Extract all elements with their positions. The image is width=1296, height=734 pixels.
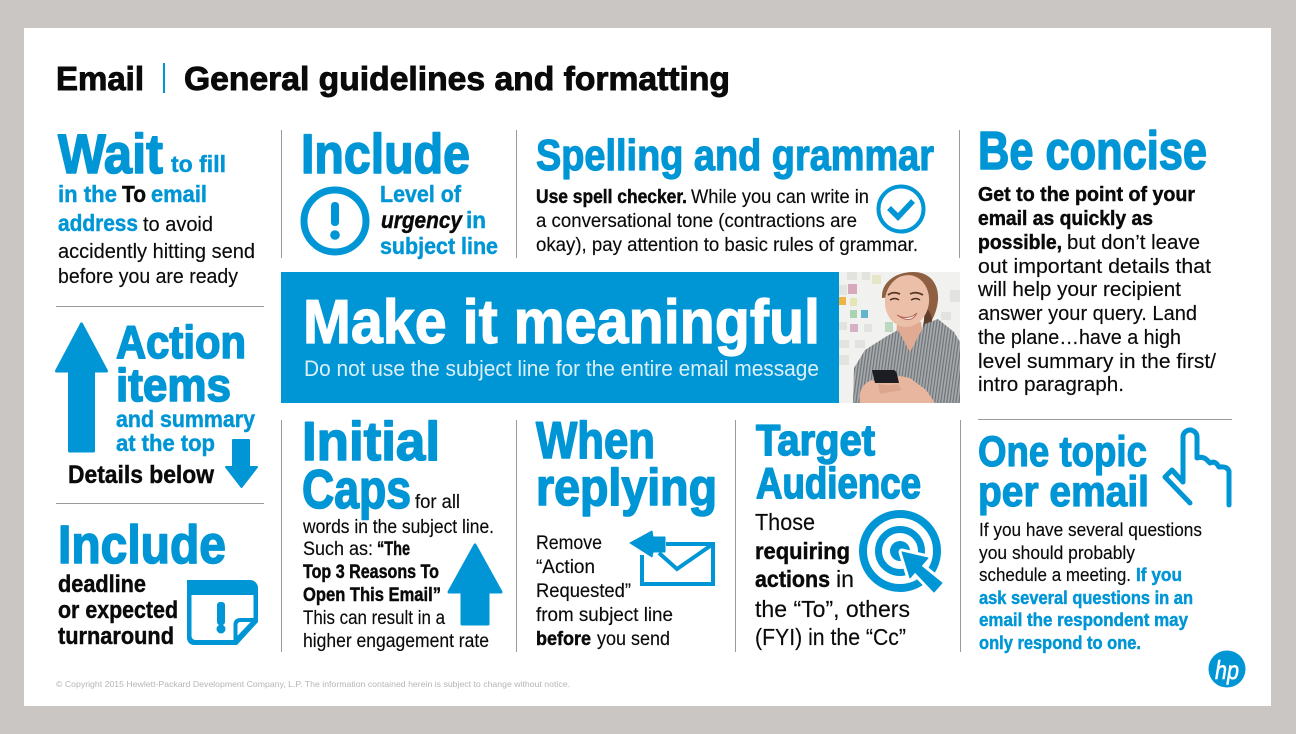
photo: woman using phone xyxy=(839,272,960,403)
panel: be concise xyxy=(977,121,1216,396)
panel: spelling and grammar: While you can write in xyxy=(691,186,869,208)
panel: wait to fill: to avoid xyxy=(143,213,213,236)
panel: wait to fill: To xyxy=(122,181,146,207)
banner: make it meaningful xyxy=(281,272,839,403)
panel: target audience xyxy=(755,416,942,650)
panel: include deadline xyxy=(58,515,258,650)
panel: be concise: possible, xyxy=(978,231,1062,254)
panel: action items: and summary xyxy=(116,406,255,432)
panel: initial caps: “The xyxy=(377,539,410,560)
panel: include urgency: in xyxy=(466,207,486,233)
panel: include deadline: turnaround xyxy=(58,623,174,650)
icon: big up arrow xyxy=(56,324,106,451)
panel: target audience: (FYI) in the “Cc” xyxy=(755,624,906,650)
panel: include urgency: Include xyxy=(301,122,470,185)
panel: target audience: Target xyxy=(756,416,875,465)
panel: when replying: Remove xyxy=(536,532,602,554)
panel: be concise: the plane…have a high xyxy=(978,326,1181,349)
panel: be concise: intro paragraph. xyxy=(978,373,1124,396)
icon: envelope with arrow xyxy=(630,531,713,584)
icon: pointing hand xyxy=(1165,430,1229,505)
panel: spelling and grammar: a conversational tone (contractions are xyxy=(536,210,857,232)
panel: be concise: Be concise xyxy=(978,121,1207,181)
panel: when replying: Requested” xyxy=(536,580,631,602)
title: General guidelines and formatting xyxy=(184,60,730,97)
icon: check mark circle xyxy=(878,186,924,232)
panel: include deadline: Include xyxy=(58,515,226,575)
panel: be concise: but don’t leave xyxy=(1067,231,1200,254)
phone xyxy=(872,370,899,383)
panel: when replying: from subject line xyxy=(536,604,673,626)
panel: target audience: Audience xyxy=(756,459,921,508)
panel: be concise: Get to the point of your xyxy=(978,183,1195,206)
panel: one topic per email: per email xyxy=(978,468,1149,516)
banner: make it meaningful: Do not use the subject line for the entire email message xyxy=(304,356,819,381)
hair xyxy=(882,272,938,320)
icon: calendar alert xyxy=(187,580,258,645)
panel: one topic per email: only respond to one. xyxy=(979,632,1141,653)
panel: spelling and grammar xyxy=(536,131,934,256)
panel: spelling and grammar: okay), pay attention to basic rules of grammar. xyxy=(536,234,918,256)
panel: one topic per email: ask several questions in an xyxy=(979,587,1193,608)
logo: hp: hp xyxy=(1215,655,1239,685)
panel: target audience: actions xyxy=(755,566,830,592)
panel: when replying: “Action xyxy=(536,556,595,578)
panel: be concise: out important details that xyxy=(978,255,1211,278)
panel: one topic per email: email the respondent may xyxy=(979,609,1189,630)
shirt xyxy=(853,319,960,403)
panel: include urgency: subject line xyxy=(380,233,498,259)
panel: when replying: When xyxy=(536,412,655,470)
panel: include urgency: urgency xyxy=(381,207,463,233)
icon: up arrow xyxy=(449,545,501,624)
panel: one topic per email: If you xyxy=(1136,564,1182,585)
panel: action items xyxy=(56,316,257,489)
panel: include deadline: deadline xyxy=(58,571,146,598)
panel: when replying: before xyxy=(536,628,591,650)
panel: be concise: will help your recipient xyxy=(977,278,1181,301)
hands xyxy=(860,374,935,403)
panel: initial caps: for all xyxy=(415,492,460,513)
panel: one topic per email: If you have several questions xyxy=(979,519,1202,540)
panel: when replying: you send xyxy=(597,628,670,650)
logo: hp xyxy=(1208,650,1246,688)
panel: action items: Details below xyxy=(68,461,215,489)
panel: one topic per email xyxy=(978,428,1229,653)
panel: include deadline: or expected xyxy=(58,597,178,624)
panel: include urgency xyxy=(301,122,498,259)
panel: initial caps: Initial xyxy=(302,410,440,472)
panel: initial caps xyxy=(302,410,501,652)
panel: wait to fill: address xyxy=(58,210,138,236)
panel: action items: items xyxy=(116,359,231,411)
panel: wait to fill: before you are ready xyxy=(58,265,239,288)
face xyxy=(884,275,930,327)
panel: initial caps: This can result in a xyxy=(303,608,445,629)
panel: one topic per email: schedule a meeting. xyxy=(979,564,1131,585)
panel: target audience: Those xyxy=(755,509,815,535)
panel: spelling and grammar: Spelling and grammar xyxy=(536,131,934,180)
panel: action items: at the top xyxy=(116,430,215,456)
panel: target audience: requiring xyxy=(755,538,850,564)
panel: one topic per email: you should probably xyxy=(979,542,1136,563)
neck xyxy=(896,322,922,352)
panel: wait to fill: in the xyxy=(58,181,117,207)
panel: wait to fill: Wait xyxy=(58,122,163,185)
banner: make it meaningful: Make it meaningful xyxy=(303,288,820,357)
panel: spelling and grammar: Use spell checker. xyxy=(536,186,687,208)
icon: exclamation circle xyxy=(304,190,366,252)
panel: initial caps: Top 3 Reasons To xyxy=(303,562,439,583)
panel: target audience: in xyxy=(836,566,854,592)
panel: target audience: the “To”, others xyxy=(755,596,910,622)
panel: be concise: email as quickly as xyxy=(978,207,1153,230)
panel: wait to fill: accidently hitting send xyxy=(58,240,255,263)
panel: wait to fill: email xyxy=(151,181,207,207)
icon: target with cursor xyxy=(863,514,942,592)
panel: initial caps: words in the subject line. xyxy=(302,517,494,538)
copyright: © Copyright 2015 Hewlett-Packard Development Company, L.P. The information contained herein is subject to change without notice. xyxy=(56,679,570,689)
panel: when replying: replying xyxy=(536,459,717,517)
panel: include urgency: Level of xyxy=(380,181,461,207)
panel: wait to fill: to fill xyxy=(171,151,226,177)
panel: be concise: answer your query. Land xyxy=(978,302,1197,325)
panel: be concise: level summary in the first/ xyxy=(978,350,1216,373)
panel: initial caps: Open This Email” xyxy=(303,585,441,606)
panel: initial caps: higher engagement rate xyxy=(303,631,489,652)
panel: one topic per email: One topic xyxy=(978,428,1147,476)
icon: small down arrow xyxy=(226,440,257,487)
panel: wait to fill xyxy=(58,122,255,288)
panel: initial caps: Such as: xyxy=(303,539,373,560)
title: Email xyxy=(56,60,144,97)
panel: action items: Action xyxy=(116,316,246,368)
panel: when replying xyxy=(536,412,717,650)
panel: initial caps: Caps xyxy=(302,458,411,520)
